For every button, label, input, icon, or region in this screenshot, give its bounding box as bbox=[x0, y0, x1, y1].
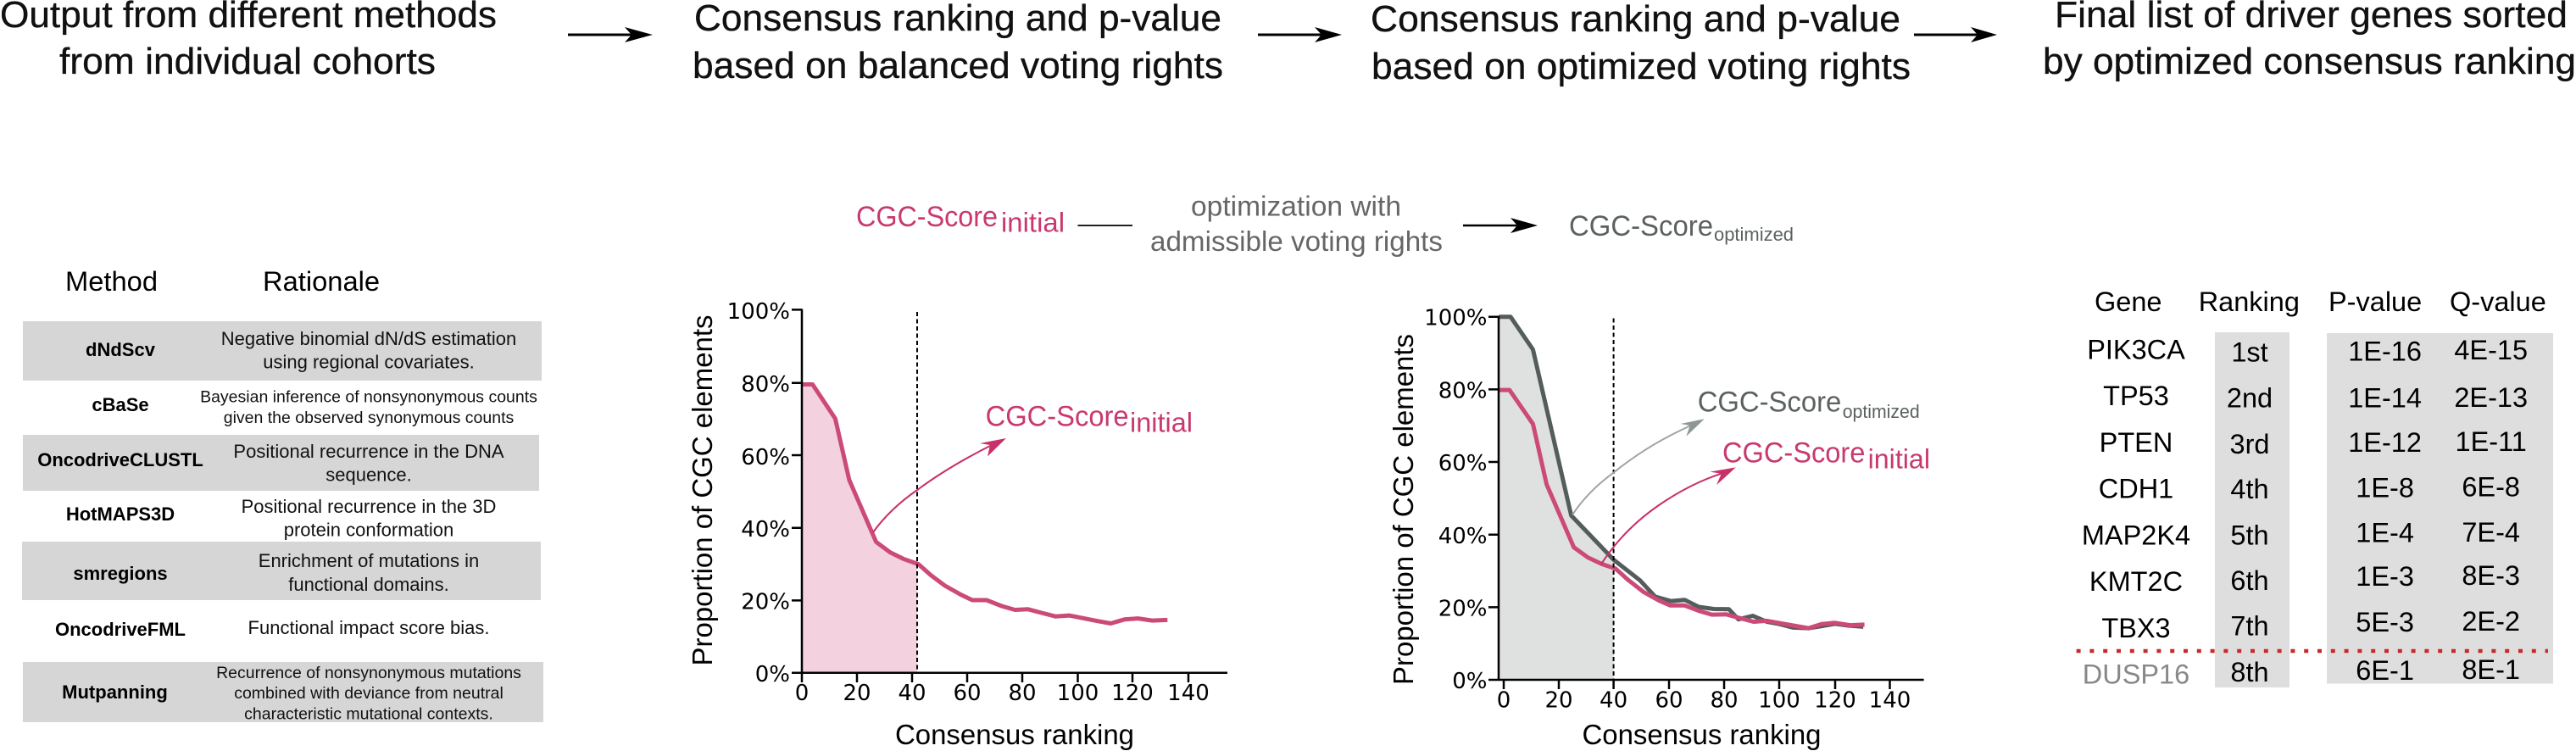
row: MAP2K4 bbox=[2082, 517, 2520, 550]
callout label: initial score: initial bbox=[1130, 408, 1193, 438]
row: smregions: functional domains. bbox=[288, 574, 449, 595]
y-axis tick labels bbox=[1424, 305, 1487, 694]
callout label: initial score bbox=[986, 401, 1193, 438]
y-axis tick labels: 0% bbox=[755, 662, 790, 687]
row: dNdScv: dNdScv bbox=[86, 339, 156, 360]
row: HotMAPS3D bbox=[66, 496, 496, 541]
row: Mutpanning: Mutpanning bbox=[62, 681, 168, 703]
x-axis tick labels: 120 bbox=[1111, 681, 1154, 706]
x-axis tick labels: 0 bbox=[1497, 687, 1511, 713]
y-axis tick labels: 20% bbox=[741, 590, 790, 615]
callout arrow: initial score bbox=[1601, 467, 1736, 565]
panel: final gene table bbox=[2077, 286, 2553, 690]
row: smregions: Enrichment of mutations in bbox=[259, 550, 479, 571]
y-axis tick labels: 60% bbox=[741, 445, 790, 470]
row: PTEN: PTEN bbox=[2100, 427, 2173, 458]
row: smregions bbox=[22, 542, 541, 600]
row: smregions: smregions bbox=[73, 563, 168, 584]
x-axis tick labels: 60 bbox=[953, 681, 982, 706]
row: HotMAPS3D: Positional recurrence in the 3D bbox=[242, 496, 496, 517]
row: Mutpanning bbox=[23, 662, 543, 724]
row: TBX3: 7th bbox=[2230, 611, 2269, 642]
heading: step 4 final list of driver genes: by optimized consensus ranking bbox=[2043, 42, 2576, 82]
table header: Gene bbox=[2095, 286, 2162, 317]
axes with ticks bbox=[1488, 315, 1924, 689]
row: Mutpanning: Recurrence of nonsynonymous mutations bbox=[216, 664, 521, 682]
row: cBaSe: given the observed synonymous counts bbox=[224, 409, 515, 427]
row: dNdScv: using regional covariates. bbox=[263, 351, 475, 373]
y-axis tick labels: 40% bbox=[741, 517, 790, 542]
row: CDH1: CDH1 bbox=[2099, 473, 2173, 503]
panel: chart optimized score bbox=[1388, 305, 1930, 750]
row: PIK3CA: 1E-16 bbox=[2348, 336, 2422, 366]
row: HotMAPS3D: HotMAPS3D bbox=[66, 503, 175, 525]
y-axis tick labels: 100% bbox=[1424, 305, 1487, 331]
line: CGC-Score optimized bbox=[1499, 317, 1863, 628]
callout label: initial score: CGC-Score bbox=[986, 401, 1129, 433]
callout label: optimized score bbox=[1698, 387, 1920, 422]
y-axis tick labels: 80% bbox=[741, 372, 790, 398]
row: PIK3CA: PIK3CA bbox=[2087, 335, 2185, 365]
ranking column background bbox=[2215, 332, 2289, 687]
row: OncodriveCLUSTL: OncodriveCLUSTL bbox=[37, 449, 203, 470]
row: TBX3: TBX3 bbox=[2101, 613, 2171, 643]
x-axis tick labels: 100 bbox=[1057, 681, 1099, 706]
optimization flow label bbox=[856, 190, 1794, 257]
row: dNdScv bbox=[23, 321, 542, 381]
callout label: optimized score: CGC-Score bbox=[1698, 387, 1841, 419]
arrow: step 2 to step 3 bbox=[1258, 27, 1342, 42]
x-axis tick labels: 120 bbox=[1814, 687, 1856, 713]
row: PTEN: 3rd bbox=[2230, 429, 2269, 459]
optimization flow label: CGC-Score bbox=[856, 201, 998, 233]
optimization flow label: optimization with bbox=[1191, 190, 1401, 222]
row: MAP2K4: MAP2K4 bbox=[2082, 520, 2190, 550]
heading: step 1 output from different methods bbox=[0, 0, 497, 82]
y-axis tick labels: 60% bbox=[1438, 451, 1487, 476]
y-axis tick labels: 0% bbox=[1452, 669, 1487, 694]
row: TP53: TP53 bbox=[2103, 381, 2169, 411]
heading: step 4 final list of driver genes bbox=[2043, 0, 2576, 82]
row: PIK3CA bbox=[2087, 335, 2528, 368]
row: TBX3: 5E-3 bbox=[2356, 607, 2414, 637]
line: CGC-Score initial bbox=[1499, 390, 1865, 628]
x-axis tick labels: 40 bbox=[898, 681, 926, 706]
callout arrow: initial score bbox=[873, 438, 1006, 532]
y-axis tick labels bbox=[727, 299, 790, 687]
callout arrow: optimized score bbox=[1572, 419, 1705, 515]
x-axis tick labels: 60 bbox=[1655, 687, 1683, 713]
row: KMT2C: 8E-3 bbox=[2462, 560, 2520, 591]
x-axis title: Consensus ranking bbox=[895, 719, 1134, 750]
heading: step 3 optimized voting rights bbox=[1371, 0, 1911, 87]
red dotted cutoff line bbox=[2077, 649, 2548, 653]
line: CGC-Score initial bbox=[802, 385, 1167, 624]
row: DUSP16: 8E-1 bbox=[2462, 654, 2520, 685]
row: KMT2C: 6th bbox=[2230, 565, 2269, 596]
panel: chart initial score bbox=[687, 299, 1227, 750]
row: TBX3: 2E-2 bbox=[2462, 606, 2520, 637]
row: Mutpanning: combined with deviance from neutral bbox=[234, 684, 504, 703]
axes with ticks bbox=[792, 309, 1227, 682]
row: cBaSe: Bayesian inference of nonsynonymous counts bbox=[200, 388, 537, 407]
y-axis tick labels: 20% bbox=[1438, 597, 1487, 622]
callout label: initial score: initial bbox=[1868, 443, 1930, 474]
x-axis tick labels: 80 bbox=[1008, 681, 1037, 706]
x-axis tick labels: 0 bbox=[795, 681, 809, 706]
row: CDH1: 4th bbox=[2230, 474, 2269, 504]
arrow: step 1 to step 2 bbox=[568, 27, 653, 42]
row: MAP2K4: 7E-4 bbox=[2462, 517, 2520, 548]
row: Mutpanning: characteristic mutational contexts. bbox=[244, 705, 493, 724]
x-axis tick labels: 20 bbox=[843, 681, 871, 706]
row: OncodriveCLUSTL: sequence. bbox=[325, 465, 412, 485]
row: MAP2K4: 5th bbox=[2230, 520, 2269, 550]
y-axis title: Proportion of CGC elements bbox=[1388, 334, 1419, 685]
row: OncodriveFML: OncodriveFML bbox=[55, 619, 186, 640]
row: MAP2K4: 1E-4 bbox=[2356, 517, 2414, 548]
heading: step 2 balanced voting rights: based on balanced voting rights bbox=[693, 46, 1223, 86]
panel: methods table bbox=[22, 265, 543, 724]
row: TP53: 2E-13 bbox=[2454, 382, 2528, 413]
row: HotMAPS3D: protein conformation bbox=[284, 519, 453, 541]
table header bbox=[2095, 286, 2546, 317]
x-axis tick labels: 100 bbox=[1758, 687, 1800, 713]
y-axis tick labels: 80% bbox=[1438, 378, 1487, 403]
arrow: step 3 to step 4 bbox=[1914, 27, 1997, 42]
row: CDH1: 1E-8 bbox=[2356, 472, 2414, 503]
optimization flow label: CGC-Score bbox=[1569, 210, 1713, 242]
callout label: initial score: CGC-Score bbox=[1722, 437, 1865, 469]
y-axis tick labels: 100% bbox=[727, 299, 790, 325]
row: cBaSe: cBaSe bbox=[92, 394, 149, 415]
row: PTEN: 1E-11 bbox=[2456, 426, 2527, 457]
heading: step 3 optimized voting rights: based on optimized voting rights bbox=[1371, 47, 1911, 87]
row: PIK3CA: 1st bbox=[2231, 337, 2268, 368]
p/q-value column background bbox=[2327, 333, 2553, 684]
row: OncodriveCLUSTL: Positional recurrence in the DNA bbox=[233, 441, 504, 462]
row: TBX3 bbox=[2101, 606, 2520, 643]
row: PTEN: 1E-12 bbox=[2348, 427, 2422, 458]
row: OncodriveCLUSTL bbox=[23, 435, 539, 491]
table header: Q-value bbox=[2450, 286, 2546, 317]
optimization flow label: optimized bbox=[1714, 224, 1794, 245]
area under curve to cutoff bbox=[802, 385, 917, 673]
row: CDH1 bbox=[2099, 471, 2520, 504]
row: OncodriveFML bbox=[55, 617, 489, 640]
optimization flow label: admissible voting rights bbox=[1150, 225, 1443, 257]
heading: step 3 optimized voting rights: Consensus ranking and p-value bbox=[1371, 0, 1900, 40]
table header: P-value bbox=[2328, 286, 2422, 317]
cutoff dashed line bbox=[916, 312, 918, 673]
row: PTEN bbox=[2100, 426, 2527, 459]
table header: Ranking bbox=[2199, 286, 2300, 317]
row: KMT2C: 1E-3 bbox=[2356, 561, 2414, 592]
row: dNdScv: Negative binomial dN/dS estimation bbox=[221, 328, 516, 349]
heading: step 1 output from different methods: from individual cohorts bbox=[59, 42, 436, 82]
cutoff dashed line bbox=[1613, 319, 1615, 680]
row: DUSP16: 6E-1 bbox=[2356, 655, 2414, 686]
row: TP53: 2nd bbox=[2227, 383, 2273, 414]
table header bbox=[65, 265, 380, 297]
row: TP53 bbox=[2103, 381, 2528, 414]
row: OncodriveFML: Functional impact score bias. bbox=[248, 617, 489, 638]
optimization flow label: initial bbox=[1001, 207, 1065, 237]
row: DUSP16: DUSP16 bbox=[2083, 659, 2189, 690]
x-axis tick labels: 20 bbox=[1544, 687, 1573, 713]
row: DUSP16 bbox=[2083, 654, 2520, 690]
x-axis tick labels bbox=[795, 681, 1210, 706]
x-axis tick labels: 140 bbox=[1167, 681, 1210, 706]
x-axis tick labels: 80 bbox=[1710, 687, 1739, 713]
x-axis tick labels: 140 bbox=[1869, 687, 1911, 713]
y-axis title: Proportion of CGC elements bbox=[687, 315, 718, 666]
row: KMT2C: KMT2C bbox=[2089, 566, 2183, 597]
x-axis tick labels: 40 bbox=[1600, 687, 1627, 713]
row: CDH1: 6E-8 bbox=[2462, 471, 2520, 502]
table header: Method bbox=[65, 265, 158, 297]
callout label: optimized score: optimized bbox=[1843, 401, 1920, 422]
heading: step 2 balanced voting rights bbox=[693, 0, 1223, 86]
row: TP53: 1E-14 bbox=[2348, 383, 2422, 414]
x-axis tick labels bbox=[1497, 687, 1911, 713]
row: DUSP16: 8th bbox=[2230, 657, 2269, 687]
callout label: initial score bbox=[1722, 437, 1930, 474]
x-axis title: Consensus ranking bbox=[1582, 719, 1821, 750]
y-axis tick labels: 40% bbox=[1438, 524, 1487, 549]
row: PIK3CA: 4E-15 bbox=[2454, 335, 2528, 365]
table header: Rationale bbox=[263, 265, 380, 297]
row: KMT2C bbox=[2089, 560, 2520, 597]
row: cBaSe bbox=[92, 388, 537, 427]
area under optimized curve to cutoff bbox=[1499, 317, 1614, 680]
